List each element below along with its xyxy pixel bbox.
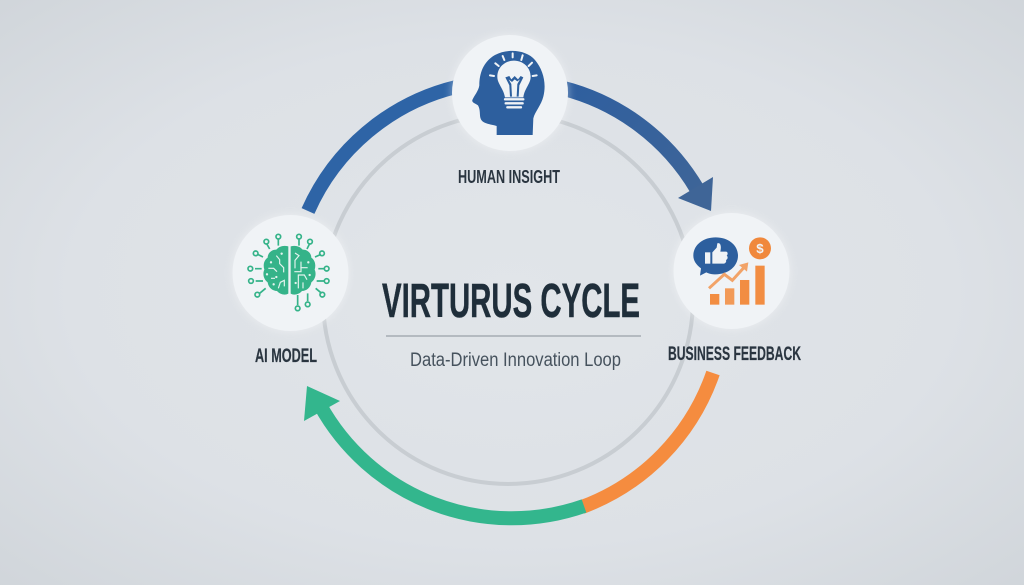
icon: head with light bulb: [472, 51, 545, 135]
node: business feedback: [668, 212, 801, 365]
icon: circuit brain: [248, 234, 329, 311]
arrow: AI model to human insight (blue arc): [308, 87, 456, 211]
node: AI model: [232, 214, 350, 367]
arrow: human insight to business feedback (blue arrow): [562, 88, 713, 211]
label: AI model: AI MODEL: [255, 346, 317, 367]
center guide ring: [323, 114, 693, 484]
node: human insight: [451, 34, 569, 187]
arrow: business feedback to AI model (orange and green arrow): [304, 373, 713, 518]
subtitle: Data-Driven Innovation Loop: [410, 350, 621, 371]
divider: [386, 335, 641, 337]
label: business feedback: BUSINESS FEEDBACK: [668, 344, 801, 365]
title: VIRTURUS CYCLE: [382, 275, 640, 328]
icon: thumbs up, coin and growth chart: $: [756, 241, 764, 256]
label: human insight: HUMAN INSIGHT: [458, 166, 560, 187]
icon: thumbs up, coin and growth chart: [693, 237, 771, 305]
